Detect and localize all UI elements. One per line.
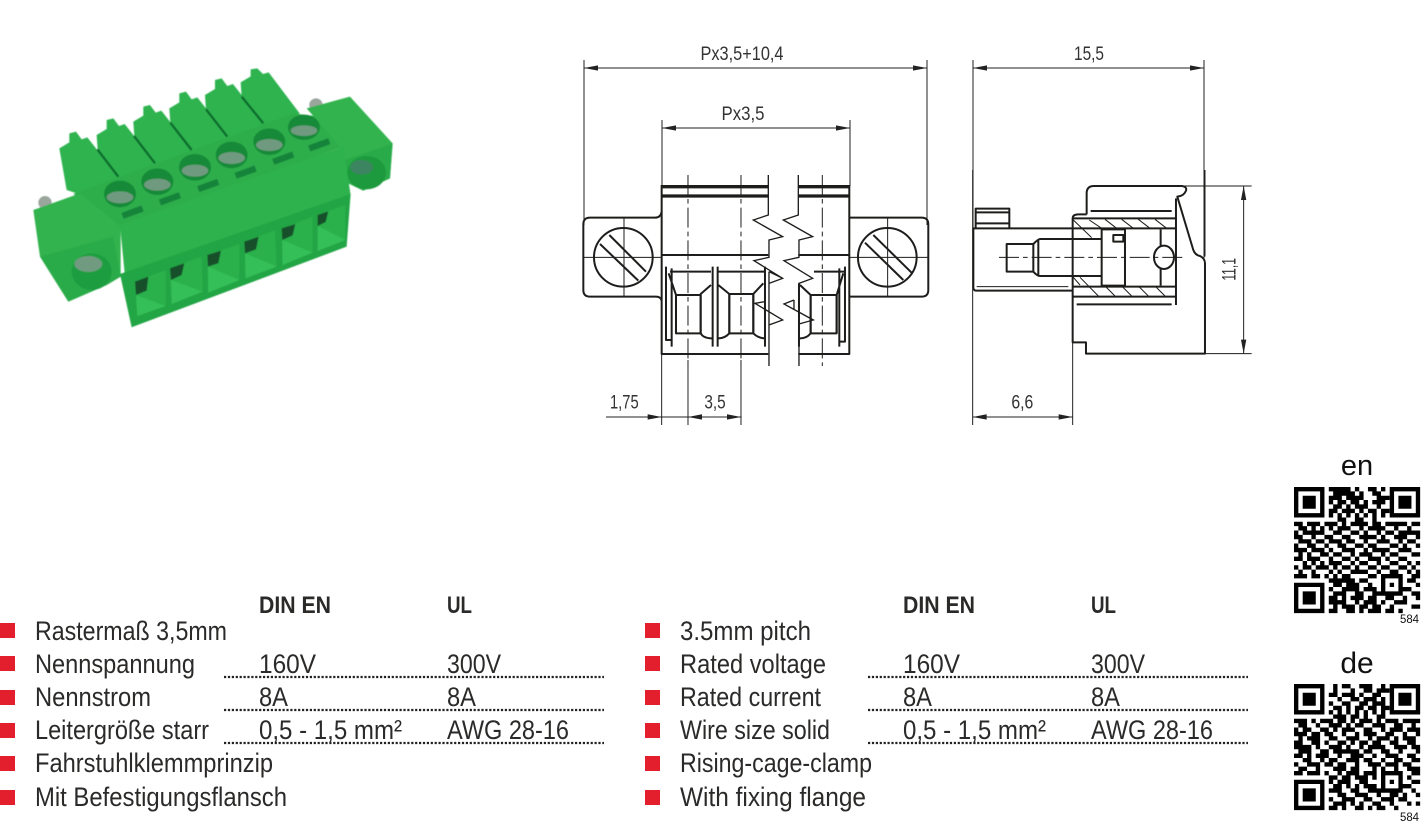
feature labels: 3.5mm pitch bbox=[680, 616, 811, 646]
rating values: 300V bbox=[447, 649, 501, 679]
bottom dimensions bbox=[606, 354, 742, 425]
dimension 6,6 bbox=[973, 342, 1073, 425]
rating values: 8A bbox=[259, 682, 288, 712]
inner section bbox=[1007, 198, 1176, 305]
rating values: 8A bbox=[903, 682, 932, 712]
rating values: 0,5 - 1,5 mm² bbox=[259, 715, 402, 745]
QR code: German: 584 bbox=[1400, 812, 1420, 824]
dimension 11,1 bbox=[1219, 186, 1246, 354]
front view technical drawing bbox=[583, 175, 928, 425]
rating values: 160V bbox=[903, 649, 960, 679]
screw holes bbox=[104, 115, 320, 207]
column headers: UL bbox=[447, 592, 472, 619]
rating values: AWG 28-16 bbox=[447, 715, 569, 745]
bottom dimensions: 3,5 bbox=[704, 393, 726, 414]
feature labels: With fixing flange bbox=[680, 782, 866, 812]
column headers: DIN EN bbox=[259, 592, 331, 619]
plug openings bbox=[135, 205, 345, 316]
opening floors bbox=[136, 226, 345, 316]
mounting flanges bbox=[583, 212, 662, 301]
rating values: 300V bbox=[1091, 649, 1145, 679]
dimension: overall width Px3,5+10,4: Px3,5+10,4 bbox=[700, 44, 784, 65]
feature labels: Nennstrom bbox=[35, 682, 151, 712]
rating values bbox=[903, 649, 1213, 745]
right flange bbox=[307, 97, 393, 191]
feature labels: Rated current bbox=[680, 682, 821, 712]
red bullets bbox=[645, 623, 660, 805]
dimension: pitch length Px3,5 bbox=[662, 104, 850, 186]
feature labels bbox=[35, 616, 287, 812]
German specification list bbox=[0, 592, 604, 812]
bottom dimensions: 1,75 bbox=[610, 393, 639, 414]
rating values: 160V bbox=[259, 649, 316, 679]
dimension: pitch length Px3,5: Px3,5 bbox=[722, 104, 764, 125]
dimension: depth 15,5: 15,5 bbox=[1074, 44, 1104, 65]
rating values: 8A bbox=[1091, 682, 1120, 712]
plug tongue bbox=[973, 209, 1073, 291]
feature labels: Nennspannung bbox=[35, 649, 195, 679]
side view technical drawing bbox=[973, 170, 1252, 425]
dimension 11,1: 11,1 bbox=[1219, 258, 1240, 281]
connector body bbox=[662, 185, 849, 354]
rating values: AWG 28-16 bbox=[1091, 715, 1213, 745]
wire entry cages bbox=[666, 267, 845, 347]
dotted leaders bbox=[868, 677, 1248, 743]
center lines bbox=[688, 175, 822, 366]
rating values: 8A bbox=[447, 682, 476, 712]
center line bbox=[999, 256, 1185, 259]
dotted leaders bbox=[224, 677, 604, 743]
latch fingers bbox=[59, 68, 300, 200]
finger gaps bbox=[97, 97, 263, 177]
feature labels: Mit Befestigungsflansch bbox=[35, 782, 287, 812]
break lines bbox=[753, 175, 813, 366]
housing outline bbox=[1073, 186, 1205, 354]
QR code: German bbox=[1294, 647, 1420, 824]
column headers bbox=[903, 592, 1116, 619]
red bullets bbox=[0, 623, 15, 805]
slots bbox=[121, 138, 330, 219]
feature labels: Rising-cage-clamp bbox=[680, 748, 872, 778]
dimension: depth 15,5 bbox=[973, 44, 1204, 258]
product photo: green terminal block connector bbox=[33, 68, 393, 327]
top surface bbox=[73, 113, 343, 227]
column headers: DIN EN bbox=[903, 592, 975, 619]
screw heads bbox=[594, 228, 917, 287]
feature labels: Leitergröße starr bbox=[35, 715, 209, 745]
feature labels: Rated voltage bbox=[680, 649, 826, 679]
left flange bbox=[33, 193, 121, 302]
feature labels: Fahrstuhlklemmprinzip bbox=[35, 748, 273, 778]
feature labels: Rastermaß 3,5mm bbox=[35, 616, 227, 646]
feature labels bbox=[680, 616, 872, 812]
QR code: English: 584 bbox=[1400, 614, 1420, 626]
dark opening tops bbox=[135, 211, 328, 295]
extension lines bbox=[973, 170, 1252, 425]
QR code: English: en bbox=[1341, 450, 1373, 482]
QR code: English bbox=[1294, 450, 1420, 626]
dimension: overall width Px3,5+10,4 bbox=[584, 44, 927, 225]
QR code: German: de bbox=[1340, 647, 1374, 680]
front plug face bbox=[120, 194, 351, 327]
rating values bbox=[259, 649, 569, 745]
column headers: UL bbox=[1091, 592, 1116, 619]
English specification list bbox=[645, 592, 1248, 812]
dimension 6,6: 6,6 bbox=[1011, 393, 1033, 414]
main front band bbox=[120, 147, 351, 277]
rating values: 0,5 - 1,5 mm² bbox=[903, 715, 1046, 745]
hatching bbox=[1073, 219, 1167, 296]
feature labels: Wire size solid bbox=[680, 715, 830, 745]
screws behind flanges bbox=[38, 98, 323, 209]
column headers bbox=[259, 592, 472, 619]
